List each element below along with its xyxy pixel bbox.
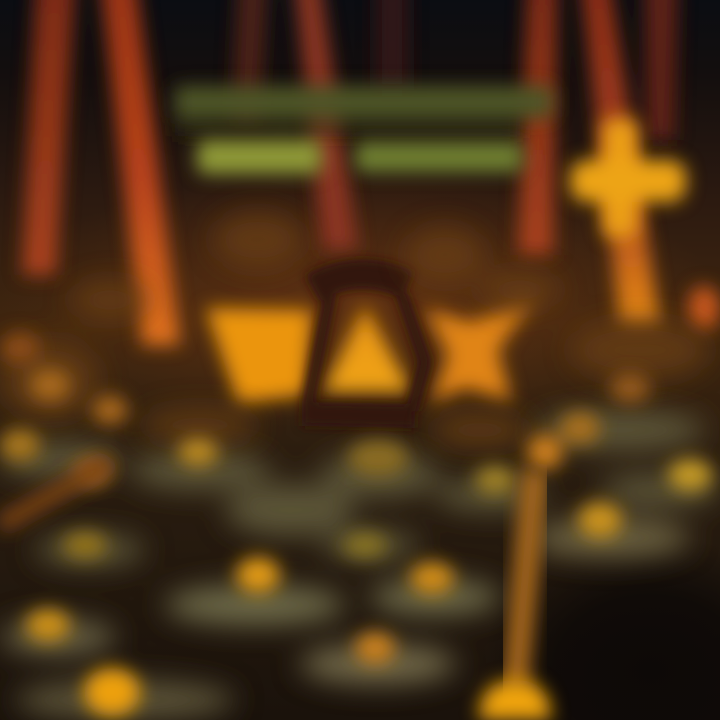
ambient glow bbox=[0, 170, 720, 720]
vertical orange post bbox=[515, 470, 535, 690]
dark arch frame bbox=[302, 274, 425, 416]
diagonal orange streak bbox=[0, 462, 110, 525]
star left bbox=[206, 308, 312, 404]
star right bbox=[425, 298, 535, 404]
red light beams bbox=[22, 0, 678, 345]
blurred heading: top line bbox=[175, 86, 553, 136]
central triangle bbox=[322, 305, 412, 392]
mottled brown glows bbox=[0, 212, 710, 448]
field of lamps: yellow flames bbox=[0, 332, 712, 664]
glowing cross bbox=[570, 118, 686, 238]
bright bottom glow left bbox=[84, 668, 140, 716]
field of lamps: olive bases bbox=[0, 410, 720, 720]
blurred heading: bottom line bbox=[197, 140, 523, 174]
bright bottom glow right bbox=[479, 680, 551, 720]
orange side glow bbox=[688, 286, 720, 330]
